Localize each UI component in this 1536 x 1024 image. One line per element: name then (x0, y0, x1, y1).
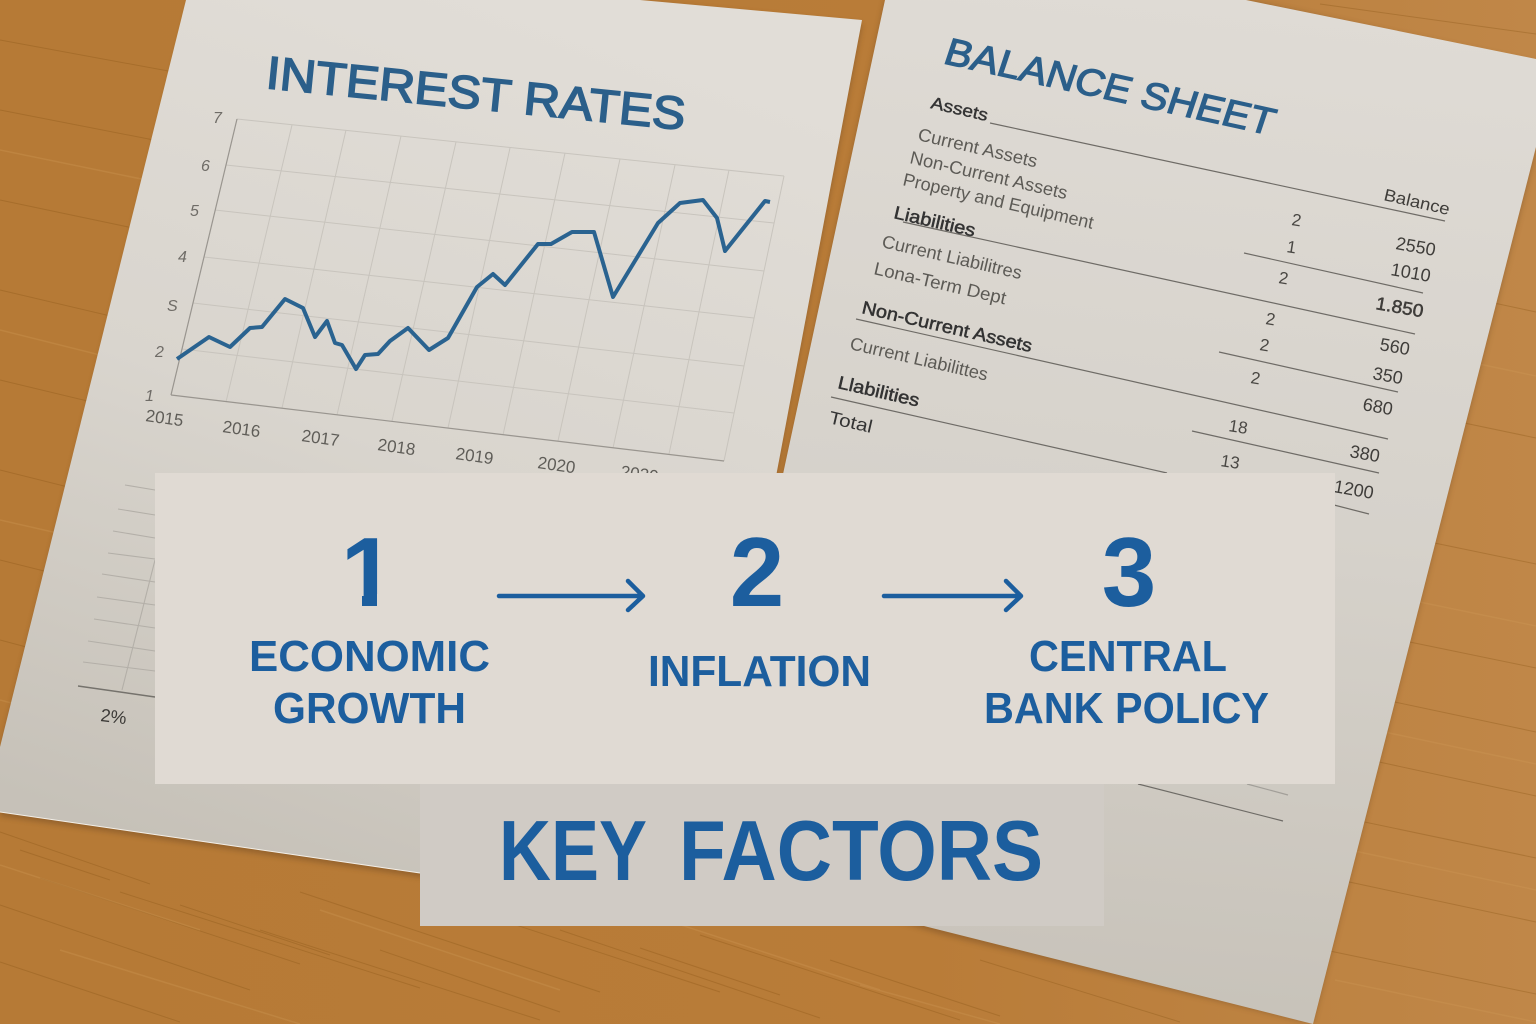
title: key factors: KEY (499, 804, 647, 899)
title: key factors (499, 804, 1043, 899)
factor 2: inflation (648, 517, 871, 696)
balance sheet balance column: 1.850 (1374, 293, 1425, 321)
balance sheet balance column: 1200 (1332, 476, 1375, 503)
x axis labels: 2015 (144, 406, 185, 430)
arrow: factor 1 to factor 2 (499, 581, 643, 610)
balance sheet balance column: 350 (1371, 363, 1404, 388)
balance sheet row labels (827, 93, 1096, 437)
balance sheet row labels: Non-Current Assets (908, 147, 1069, 203)
balance sheet middle column (1219, 210, 1303, 473)
balance sheet middle column: 2 (1258, 335, 1271, 355)
factor 1: economic growth: ECONOMIC (249, 632, 490, 681)
balance sheet middle column: 2 (1249, 368, 1262, 388)
balance sheet middle column: 2 (1264, 309, 1277, 329)
x axis labels: 2019 (454, 444, 495, 468)
y axis labels: S (167, 298, 178, 315)
balance sheet row labels: Lona-Term Dept (872, 258, 1008, 308)
factor 2: inflation: INFLATION (648, 647, 871, 696)
balance sheet row labels: Current Assets (916, 124, 1039, 171)
factor 3: central bank policy: CENTRAL (1029, 632, 1227, 681)
y axis labels: 2 (154, 344, 164, 361)
heading: interest rates: INTEREST RATES (264, 46, 688, 140)
balance sheet middle column: 1 (1285, 237, 1298, 257)
y axis labels (145, 110, 223, 405)
x axis labels: 2018 (376, 435, 417, 459)
factor 2: inflation: 2 (730, 517, 784, 627)
balance sheet balance column: 1010 (1389, 259, 1432, 286)
panel: balance sheet paper (700, 0, 1536, 1024)
secondary chart at bottom of paper (78, 485, 155, 728)
balance sheet balance column (1332, 185, 1452, 503)
x axis labels: 2030 (619, 462, 660, 486)
y axis labels: 6 (201, 158, 210, 175)
balance sheet middle column: 18 (1227, 416, 1249, 438)
factor 1: economic growth: GROWTH (273, 684, 466, 733)
line chart: interest rates 2015 to 2030 (144, 110, 784, 486)
chart axes (171, 119, 724, 461)
x axis labels: 2016 (221, 417, 262, 441)
balance sheet balance column: Balance (1382, 185, 1452, 219)
balance sheet row labels: Property and Equipment (901, 169, 1096, 233)
balance sheet row labels: Current Liabilitres (880, 231, 1024, 283)
factor 1: economic growth (249, 517, 490, 733)
y axis labels: 4 (178, 249, 187, 266)
balance sheet balance column: 2550 (1394, 233, 1437, 260)
chart grid (182, 119, 784, 461)
y axis labels: 5 (190, 203, 199, 220)
table rules (831, 123, 1445, 821)
factor 3: central bank policy: 3 (1102, 517, 1156, 627)
balance sheet balance column: 380 (1348, 441, 1381, 466)
balance sheet row labels: Total (827, 407, 874, 437)
panel: interest rates paper (0, 0, 862, 880)
factor 3: central bank policy: BANK POLICY (984, 684, 1269, 733)
x axis labels (144, 406, 660, 486)
data line (177, 200, 770, 369)
balance sheet row labels: Liabilities (892, 202, 977, 241)
percent label: 2% (100, 705, 128, 728)
balance sheet balance column: 680 (1361, 394, 1394, 419)
arrow: factor 2 to factor 3 (884, 581, 1021, 610)
factor 3: central bank policy (984, 517, 1269, 733)
title: key factors: FACTORS (679, 804, 1043, 899)
y axis labels: 1 (145, 388, 154, 405)
balance sheet balance column: 560 (1378, 334, 1411, 359)
factor 1: economic growth: 1 (341, 517, 395, 627)
balance sheet row labels: Llabilities (836, 372, 921, 411)
balance sheet row labels: Non-Current Assets (860, 297, 1034, 356)
y axis labels: 7 (213, 110, 223, 127)
heading: balance sheet: BALANCE SHEET (939, 32, 1281, 144)
panel: key factors banner background (420, 784, 1104, 926)
balance sheet row labels: Assets (929, 93, 990, 125)
panel: factor flow background (155, 473, 1335, 784)
x axis labels: 2017 (300, 426, 341, 450)
balance sheet middle column: 13 (1219, 451, 1241, 473)
x axis labels: 2020 (536, 453, 577, 477)
balance sheet middle column: 2 (1277, 268, 1290, 288)
balance sheet row labels: Current Liabilittes (848, 333, 990, 385)
balance sheet middle column: 2 (1290, 210, 1303, 230)
